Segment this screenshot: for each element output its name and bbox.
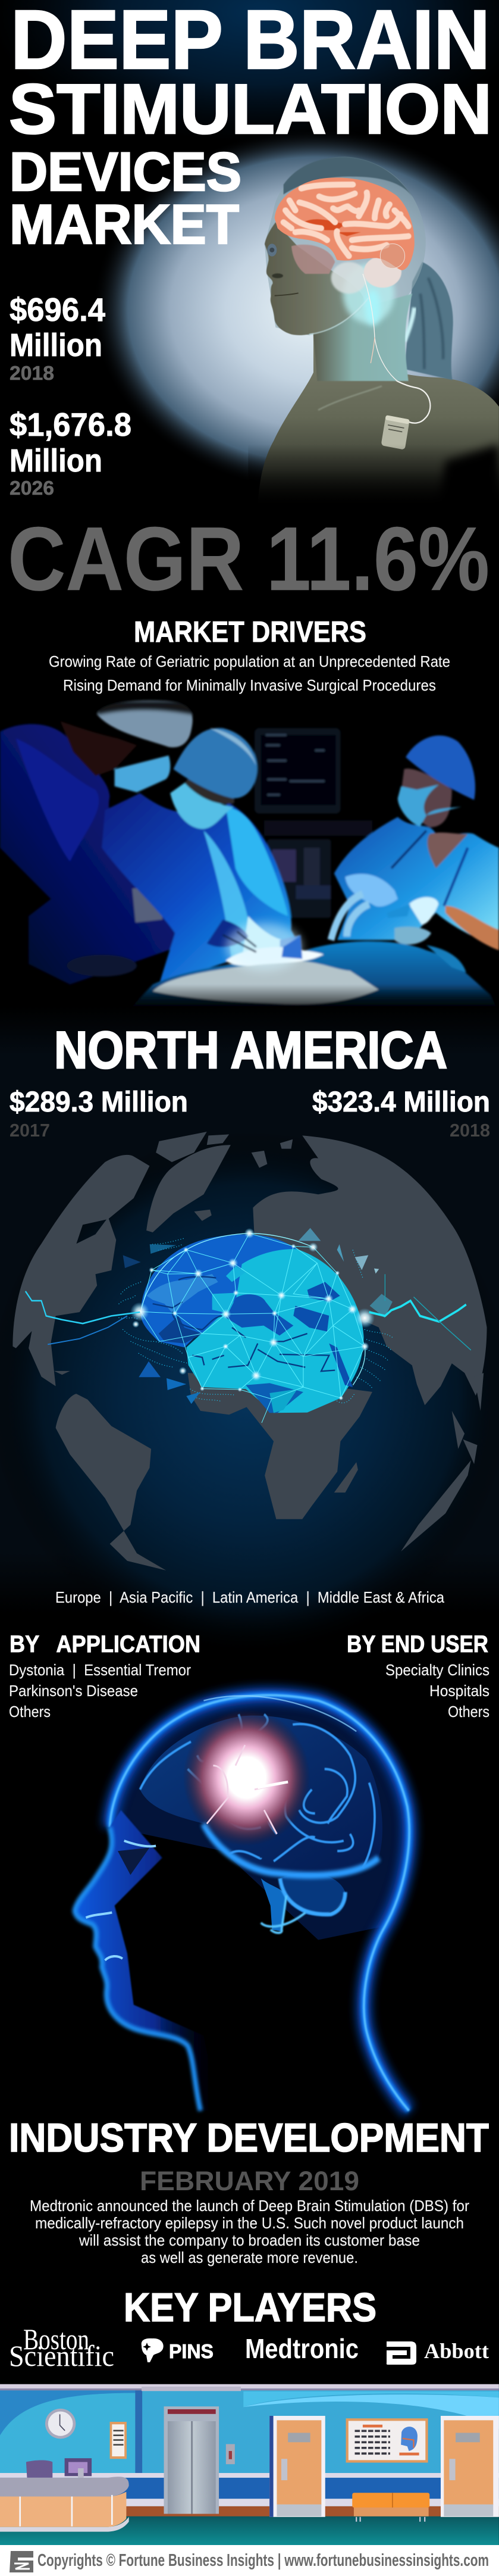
panel: North America section background — [0, 1006, 499, 1655]
stat: 2017 North America value — [10, 1086, 188, 1141]
logo: PINS: PINS — [169, 2340, 214, 2362]
top navy glow — [0, 0, 499, 143]
stat: 2018 market size: $696.4 — [10, 291, 105, 328]
icon: brain — [275, 177, 415, 270]
stat: 2026 market size — [10, 406, 131, 499]
stat: 2018 North America value: 2018 — [450, 1120, 490, 1141]
ponytail — [404, 262, 453, 380]
heading: market drivers: MARKET DRIVERS — [134, 616, 366, 648]
background halo — [92, 128, 499, 491]
logo: Abbott: Abbott — [424, 2339, 489, 2363]
logo: Abbott — [387, 2339, 489, 2365]
logo: PINS — [142, 2338, 214, 2362]
elevator — [164, 2406, 235, 2514]
stat: 2018 North America value — [312, 1086, 490, 1141]
title line 2: STIMULATION — [9, 70, 492, 149]
stat: 2018 market size — [10, 291, 105, 384]
stat: 2018 North America value: $323.4 Million — [312, 1086, 490, 1118]
wall notice — [110, 2422, 127, 2459]
spark nodes — [130, 1228, 375, 1400]
middle surgeon — [102, 728, 302, 985]
head outer blur glow — [110, 1695, 409, 2110]
panel: segmentation by end user: Specialty Clinics — [385, 1661, 489, 1679]
text: market drivers list — [49, 652, 450, 694]
electrode lead wire — [363, 274, 398, 382]
panel: segmentation by end user — [347, 1631, 489, 1721]
stat: 2017 North America value: 2017 — [10, 1120, 50, 1141]
text: other regions: Europe | Asia Pacific | Latin America | Middle East & Africa — [55, 1588, 444, 1606]
neck — [313, 293, 412, 381]
icon: electric sparks across globe — [26, 1274, 471, 1350]
panel: segmentation by application: BY APPLICATION — [10, 1631, 200, 1657]
particle dots — [119, 1238, 393, 1403]
panel: segmentation by application: Dystonia | Essential Tremor — [9, 1661, 191, 1679]
heading: North America: NORTH AMERICA — [54, 1020, 447, 1079]
logo: Boston Scientific: Boston — [23, 2322, 89, 2356]
panel: segmentation by application — [9, 1631, 200, 1721]
image: surgeons operating — [0, 700, 499, 1015]
skull inner fill — [110, 1695, 409, 1940]
logo: Boston Scientific — [9, 2322, 114, 2372]
stat: 2026 market size: Million — [10, 443, 102, 479]
text: development description: Medtronic announced the launch of Deep Brain Stimulation (DBS) for — [30, 2197, 469, 2215]
icon: Fortune Business Insights logo — [10, 2551, 33, 2572]
door right — [441, 2416, 499, 2517]
icon: wall clock — [45, 2409, 76, 2438]
map: world globe — [12, 1132, 487, 1570]
brain body dark half — [141, 1234, 297, 1347]
title line 4: MARKET — [10, 193, 239, 255]
stat: 2018 market size: Million — [10, 327, 102, 363]
text: development description: will assist the company to broaden its customer base — [79, 2231, 420, 2249]
logo: Boston Scientific: Scientific — [9, 2339, 114, 2372]
face profile — [75, 1810, 219, 2110]
reception desk — [0, 2458, 129, 2532]
image: glowing head profile with brain — [75, 1695, 409, 2110]
panel: segmentation by end user: Hospitals — [429, 1682, 489, 1700]
panel: segmentation by application: Others — [9, 1703, 51, 1721]
right nurse — [331, 736, 499, 950]
left surgeon — [0, 700, 223, 985]
brain lobes — [140, 1716, 382, 1933]
patient and surgical drapes — [127, 923, 499, 1012]
floor — [0, 2516, 499, 2545]
icon: woman head with brain — [265, 157, 453, 382]
brain body light half — [186, 1249, 364, 1413]
neural cracks — [153, 1276, 335, 1371]
footer band — [0, 2545, 499, 2576]
icon: woman shoulders and device — [248, 328, 499, 509]
bench — [352, 2493, 429, 2522]
text: market drivers list: Rising Demand for Minimally Invasive Surgical Procedures — [63, 676, 436, 694]
stat: 2026 market size: $1,676.8 — [10, 406, 131, 443]
face — [265, 222, 364, 335]
stat: 2026 market size: 2026 — [10, 477, 54, 499]
icon: glowing polygon brain over globe — [119, 1228, 393, 1423]
panel: segmentation by application: Parkinson's Disease — [9, 1682, 138, 1700]
brain folds — [140, 1715, 375, 1868]
text: development description — [30, 2197, 469, 2266]
walls — [0, 2384, 499, 2517]
heading: key players: KEY PLAYERS — [124, 2285, 376, 2330]
illustration: hospital corridor — [0, 2384, 499, 2545]
door left — [269, 2416, 325, 2517]
text: development description: medically-refractory epilepsy in the U.S. Such novel product launch — [35, 2214, 464, 2232]
monitors — [255, 728, 372, 918]
panel: hero with title and woman illustration — [0, 0, 499, 509]
cyan glow — [343, 264, 394, 323]
date: February 2019: FEBRUARY 2019 — [140, 2166, 359, 2196]
temporal lobes — [291, 245, 335, 274]
floating triangles — [123, 1228, 393, 1404]
stat: 2017 North America value: $289.3 Million — [10, 1086, 188, 1118]
title line 3: DEVICES — [10, 142, 241, 202]
logo: Medtronic: Medtronic — [245, 2333, 359, 2364]
text: development description: as well as generate more revenue. — [141, 2249, 358, 2266]
stimulation glow — [183, 1709, 310, 1846]
network mesh — [141, 1234, 365, 1423]
text: market drivers list: Growing Rate of Geriatric population at an Unprecedented Rate — [49, 652, 450, 670]
stat: 2018 market size: 2018 — [10, 362, 54, 384]
skull — [265, 157, 426, 335]
poster — [346, 2418, 428, 2463]
panel: segmentation by end user: Others — [448, 1703, 489, 1721]
